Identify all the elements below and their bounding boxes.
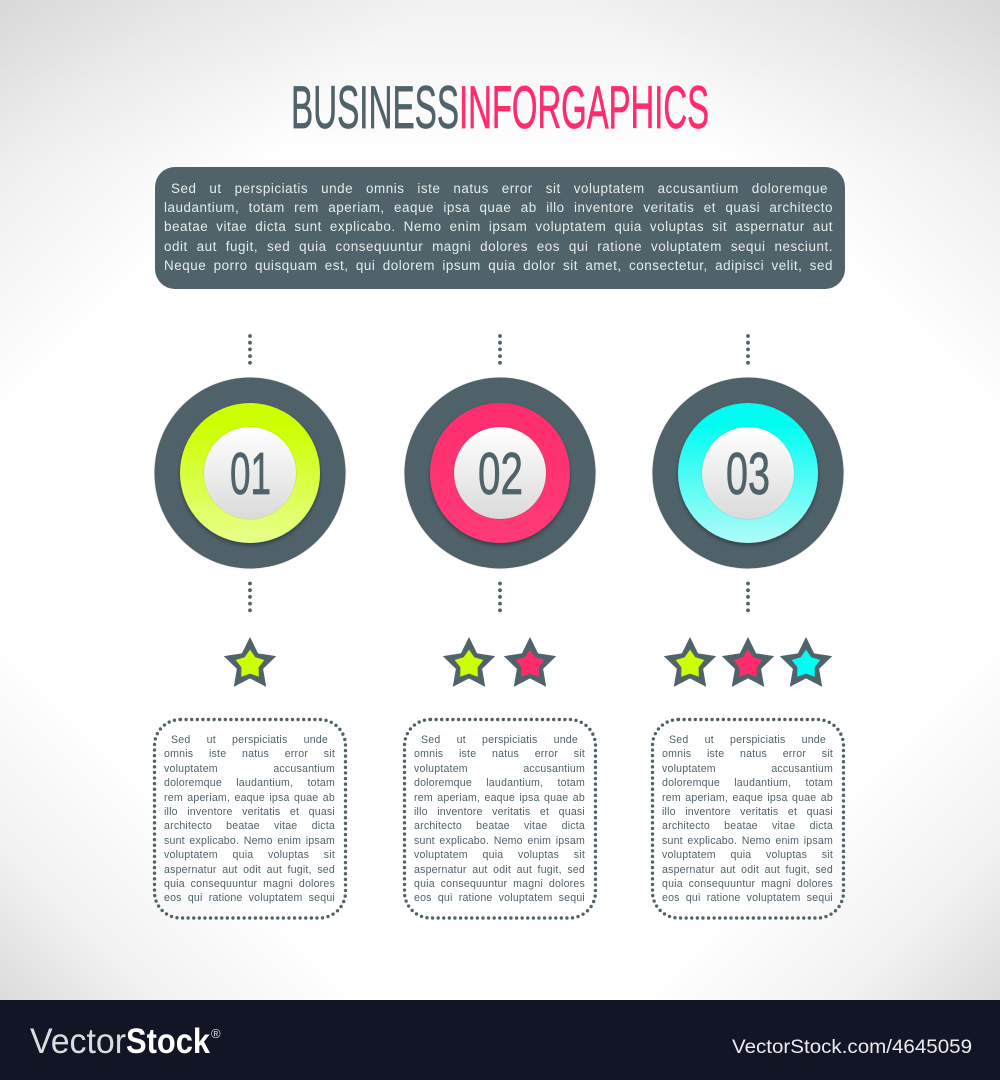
connector dots below 01	[248, 582, 252, 612]
text block 01: sunt explicabo. Nemo enim ipsam	[164, 835, 335, 847]
badge 01: 01	[230, 441, 271, 507]
text block 01: quia consequuntur magni dolores	[164, 878, 335, 890]
text block 02: architecto beatae vitae dicta	[414, 820, 585, 832]
title: INFORGAPHICS	[459, 74, 709, 141]
connector dots above 01	[248, 334, 252, 365]
intro text block: Neque porro quisquam est, qui dolorem ipsum quia dolor sit amet, consectetur, adipisci velit, sed	[164, 258, 833, 273]
text block 02: rem aperiam, eaque ipsa quae ab	[414, 792, 585, 804]
footer	[0, 1000, 1000, 1080]
text block 01: voluptatem accusantium	[164, 763, 335, 775]
star rating 01	[224, 637, 276, 687]
text block 03: voluptatem accusantium	[662, 763, 833, 775]
text block 03: quia consequuntur magni dolores	[662, 878, 833, 890]
star rating 03	[664, 637, 832, 687]
text block 02: voluptatem accusantium	[414, 763, 585, 775]
text block 03: Sed ut perspiciatis unde	[669, 734, 826, 746]
intro text block	[164, 180, 833, 273]
text block 01: architecto beatae vitae dicta	[164, 820, 335, 832]
text block 03: architecto beatae vitae dicta	[662, 820, 833, 832]
text block 02: omnis iste natus error sit	[414, 748, 585, 760]
text block 01: illo inventore veritatis et quasi	[164, 806, 335, 818]
panel: intro text background	[155, 167, 845, 289]
text block 02: eos qui ratione voluptatem sequi	[414, 892, 585, 904]
text block 03: aspernatur aut odit aut fugit, sed	[662, 864, 833, 876]
step 02	[404, 334, 596, 918]
intro text block: odit aut fugit, sed quia consequuntur magni dolores eos qui ratione voluptatem sequi nesciunt.	[164, 239, 833, 254]
text block 03: eos qui ratione voluptatem sequi	[662, 892, 833, 904]
text block 03: omnis iste natus error sit	[662, 748, 833, 760]
footer image id: VectorStock.com/4645059	[732, 1036, 972, 1058]
text block 01: rem aperiam, eaque ipsa quae ab	[164, 792, 335, 804]
text block 01: Sed ut perspiciatis unde	[171, 734, 328, 746]
step 01	[154, 334, 346, 918]
text block 03: sunt explicabo. Nemo enim ipsam	[662, 835, 833, 847]
text block 02	[414, 734, 585, 904]
dotted frame 02	[404, 720, 596, 918]
badge 03: 03	[726, 441, 770, 507]
text block 03	[662, 734, 833, 904]
badge 03	[652, 378, 844, 568]
footer logo	[30, 1022, 221, 1061]
connector dots below 03	[746, 582, 750, 612]
text block 02: aspernatur aut odit aut fugit, sed	[414, 864, 585, 876]
dotted frame 03	[652, 720, 844, 918]
star rating 02	[443, 637, 556, 687]
text block 01: omnis iste natus error sit	[164, 748, 335, 760]
text block 02: doloremque laudantium, totam	[414, 777, 585, 789]
connector dots above 02	[498, 334, 502, 365]
intro text block: Sed ut perspiciatis unde omnis iste natus error sit voluptatem accusantium doloremque	[171, 180, 828, 196]
text block 02: sunt explicabo. Nemo enim ipsam	[414, 835, 585, 847]
text block 03: voluptatem quia voluptas sit	[662, 849, 833, 861]
badge 01	[154, 378, 346, 568]
footer logo: ®	[211, 1026, 221, 1041]
badge 02: 02	[478, 441, 523, 507]
step 03	[652, 334, 844, 918]
footer logo: Stock	[126, 1022, 210, 1061]
text block 01: voluptatem quia voluptas sit	[164, 849, 335, 861]
connector dots above 03	[746, 334, 750, 365]
text block 02: voluptatem quia voluptas sit	[414, 849, 585, 861]
footer logo: Vector	[30, 1022, 126, 1061]
dotted frame 01	[154, 720, 346, 918]
text block 03: illo inventore veritatis et quasi	[662, 806, 833, 818]
text block 01: doloremque laudantium, totam	[164, 777, 335, 789]
text block 02: Sed ut perspiciatis unde	[421, 734, 578, 746]
text block 02: illo inventore veritatis et quasi	[414, 806, 585, 818]
badge 02	[404, 378, 596, 568]
text block 01: aspernatur aut odit aut fugit, sed	[164, 864, 335, 876]
text block 03: doloremque laudantium, totam	[662, 777, 833, 789]
text block 02: quia consequuntur magni dolores	[414, 878, 585, 890]
text block 01	[164, 734, 335, 904]
text block 03: rem aperiam, eaque ipsa quae ab	[662, 792, 833, 804]
intro text block: beatae vitae dicta sunt explicabo. Nemo enim ipsam voluptatem quia voluptas sit aspernatur aut	[164, 219, 833, 234]
connector dots below 02	[498, 582, 502, 612]
title: BUSINESS	[291, 74, 459, 141]
intro text block: laudantium, totam rem aperiam, eaque ipsa quae ab illo inventore veritatis et quasi architecto	[164, 200, 833, 215]
text block 01: eos qui ratione voluptatem sequi	[164, 892, 335, 904]
